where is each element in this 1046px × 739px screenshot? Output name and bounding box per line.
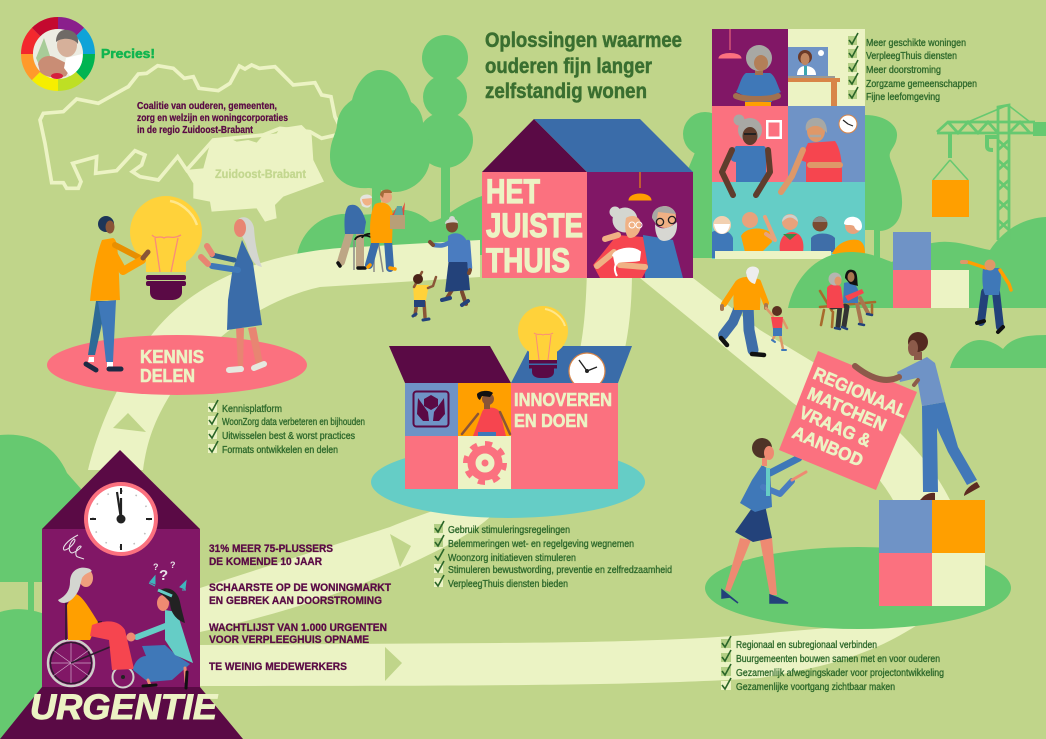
- heading: kennis delen: KENNIS: [140, 347, 204, 367]
- list: innoveren en doen: Woonzorg initiatieven stimuleren: [448, 553, 576, 564]
- lamp: [719, 29, 741, 58]
- caregiver: ?: [170, 560, 176, 570]
- heading: innoveren en doen: EN DOEN: [514, 411, 588, 431]
- caregiver: ?: [153, 562, 158, 572]
- heading: het juiste thuis: JUISTE: [486, 207, 583, 245]
- list: kennis delen: [208, 400, 365, 456]
- woman in orange cell: [462, 391, 510, 436]
- woman in purple room: [736, 45, 781, 106]
- heading: urgentie: URGENTIE: [30, 688, 219, 727]
- list: innoveren en doen: Gebruik stimuleringsregelingen: [448, 525, 570, 536]
- crane: [933, 105, 1046, 240]
- panel: top building with care scenes: [712, 29, 865, 259]
- coalition text: Coalitie van ouderen, gemeenten,: [137, 101, 277, 112]
- woman with long grey hair: [201, 217, 264, 370]
- list: regionaal matchen: Regionaal en subregionaal verbinden: [736, 640, 877, 651]
- panel: Innoveren en doen box: [371, 306, 645, 518]
- map of Noord-Brabant outline: [40, 65, 343, 222]
- list: regionaal matchen: Buurgemeenten bouwen samen met en voor ouderen: [736, 654, 940, 665]
- list: regionaal matchen: Gezamenlijke voortgang zichtbaar maken: [736, 682, 895, 693]
- list: top results: [848, 33, 977, 103]
- list: top results: Fijne leefomgeving: [866, 92, 940, 103]
- group of seniors at a table: [712, 212, 865, 259]
- man pointing: [962, 260, 1011, 332]
- hanging lamp: [629, 172, 651, 200]
- confused scribble: [64, 535, 84, 559]
- clock: [569, 353, 605, 389]
- list: innoveren en doen: Belemmeringen wet- en regelgeving wegnemen: [448, 539, 634, 550]
- heading: regionaal matchen vraag en aanbod: VRAAG &: [796, 402, 874, 451]
- icon: hands holding box: [414, 392, 448, 426]
- person in orange: [86, 216, 148, 370]
- list: top results: VerpleegThuis diensten: [866, 51, 957, 62]
- list: innoveren en doen: VerpleegThuis diensten bieden: [448, 579, 568, 590]
- heading: het juiste thuis: THUIS: [486, 242, 570, 280]
- man on blocks: [855, 332, 980, 500]
- pink sign: [779, 351, 917, 490]
- people on the path: walker and grocery helper: [338, 189, 405, 272]
- list: regionaal matchen: Gezamenlijk afwegingskader voor projectontwikkeling: [736, 668, 944, 679]
- colour blocks: [879, 500, 985, 606]
- list: innoveren en doen: Stimuleren bewustwording, preventie en zelfredzaamheid: [448, 565, 672, 576]
- urgency facts: [209, 543, 391, 673]
- heading: innoveren en doen: [514, 390, 612, 431]
- woman in wheelchair: [48, 568, 134, 688]
- list: top results: Meer doorstroming: [866, 65, 941, 76]
- list: top results: Zorgzame gemeenschappen: [866, 79, 977, 90]
- title: [485, 29, 682, 103]
- urgency facts: SCHAARSTE OP DE WONINGMARKT: [209, 582, 391, 594]
- panel: Kennis delen: [47, 196, 307, 395]
- small light bulb: [518, 306, 568, 378]
- heading: regionaal matchen vraag en aanbod: AANBOD: [789, 422, 866, 471]
- stacked blocks near crane: [893, 232, 969, 308]
- path direction arrows: [113, 413, 411, 681]
- list: top results: Meer geschikte woningen: [866, 38, 966, 49]
- list: innoveren en doen: [434, 521, 672, 590]
- heading: het juiste thuis: HET: [486, 173, 540, 211]
- old woman and toddler on the path: [413, 216, 470, 320]
- clock at five to twelve: [84, 482, 158, 556]
- caregiver: ?: [159, 567, 168, 584]
- coalition text: [137, 101, 288, 136]
- crane load box: [932, 180, 969, 217]
- panel: Urgentie house: [0, 450, 243, 739]
- heading: kennis delen: DELEN: [140, 366, 195, 386]
- big light bulb: [130, 196, 202, 300]
- woman pushing sign: [722, 438, 806, 603]
- logo: Precies: [27, 23, 89, 85]
- urgency facts: WACHTLIJST VAN 1.000 URGENTEN: [209, 622, 387, 634]
- heading: regionaal matchen vraag en aanbod: REGIONAAL: [810, 363, 910, 422]
- urgency facts: EN GEBREK AAN DOORSTROMING: [209, 595, 382, 607]
- doctor on video screen: [788, 47, 840, 106]
- heading: regionaal matchen vraag en aanbod: MATCHEN: [804, 383, 889, 435]
- list: kennis delen: Formats ontwikkelen en delen: [222, 445, 338, 456]
- list: kennis delen: Uitwisselen best & worst practices: [222, 431, 355, 442]
- woman with glasses: [722, 114, 782, 195]
- pink ellipse: [47, 335, 307, 395]
- heading: kennis delen: [140, 347, 204, 386]
- urgency facts: 31% MEER 75-PLUSSERS: [209, 543, 333, 555]
- teal ellipse: [371, 446, 645, 518]
- logo label: Precies!: Precies!: [101, 46, 155, 61]
- elderly couple with cat: [593, 206, 683, 278]
- list: kennis delen: Kennisplatform: [222, 404, 282, 415]
- urgency facts: VOOR VERPLEEGHUIS OPNAME: [209, 634, 369, 646]
- heading: regionaal matchen vraag en aanbod: [789, 363, 910, 471]
- title: ouderen fijn langer: [485, 55, 652, 78]
- heading: innoveren en doen: INNOVEREN: [514, 390, 612, 410]
- hills on the right: [788, 217, 1046, 368]
- title: zelfstandig wonen: [485, 80, 647, 103]
- heading: het juiste thuis: [486, 173, 583, 280]
- list: regionaal matchen: [721, 636, 944, 693]
- list: kennis delen: WoonZorg data verbeteren en bijhouden: [222, 417, 365, 428]
- man with moustache: [781, 115, 857, 192]
- coalition text: zorg en welzijn en woningcorporaties: [137, 113, 288, 124]
- urgency facts: DE KOMENDE 10 JAAR: [209, 556, 322, 568]
- caregiver: [126, 560, 193, 688]
- urgency facts: TE WEINIG MEDEWERKERS: [209, 661, 347, 673]
- grandfather and grandchild walking: [721, 266, 787, 355]
- icon: gear: [466, 444, 504, 482]
- panel: Regionaal matchen: [705, 332, 1011, 629]
- coalition text: in de regio Zuidoost-Brabant: [137, 125, 254, 136]
- green ellipse: [705, 547, 1011, 629]
- panel: Het juiste thuis house: [482, 119, 693, 280]
- title: Oplossingen waarmee: [485, 29, 682, 52]
- winding path: [88, 240, 950, 686]
- couple on bench: [820, 270, 875, 329]
- label: Zuidoost-Brabant: Zuidoost-Brabant: [215, 167, 306, 181]
